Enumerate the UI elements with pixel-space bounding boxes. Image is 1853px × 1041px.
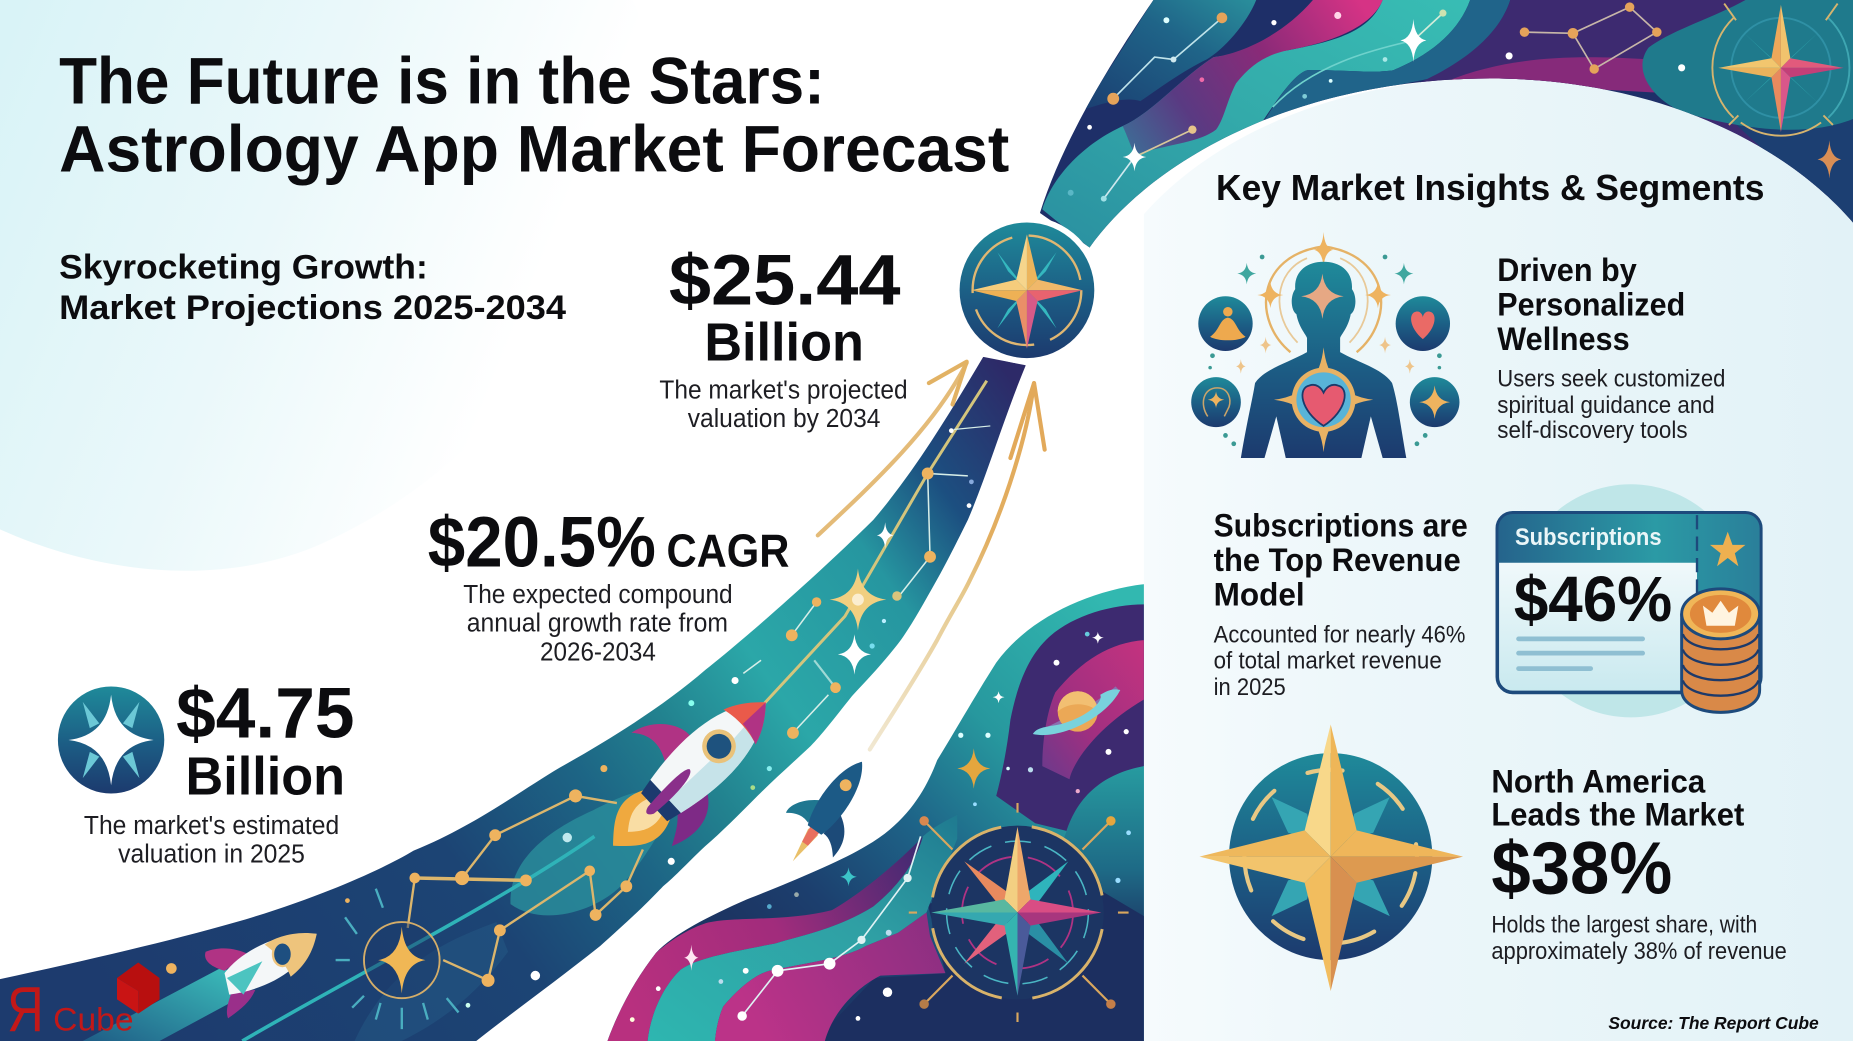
stat: 20.5 percent CAGR: 2026-2034	[540, 636, 656, 666]
stat: 25.44 billion	[659, 241, 908, 433]
insight: subscriptions: of total market revenue	[1214, 648, 1442, 675]
panel heading: Key Market Insights & Segments	[1216, 168, 1764, 208]
insight: north america: $38%	[1491, 826, 1672, 910]
insight: personalized wellness: Users seek customized	[1497, 366, 1725, 393]
stat: 4.75 billion: The market's estimated	[84, 810, 339, 840]
source note: Source: The Report Cube	[1608, 1013, 1819, 1033]
subtitle: Skyrocketing Growth:	[59, 248, 428, 286]
rocket: small navy	[765, 742, 888, 879]
compass emblem: central	[954, 217, 1100, 364]
stat: 25.44 billion: Billion	[704, 313, 864, 373]
coin stack	[1682, 589, 1760, 712]
rocket: large	[566, 651, 797, 879]
insight: subscriptions: in 2025	[1214, 674, 1286, 701]
insight: personalized wellness: Personalized	[1497, 286, 1685, 322]
rocket: lower left	[83, 933, 317, 1041]
title	[59, 44, 1009, 185]
insight: subscriptions	[1214, 507, 1468, 701]
icon: white star badge	[58, 686, 164, 794]
stat: 4.75 billion	[84, 674, 355, 869]
gold arrow: right	[870, 383, 1045, 750]
background: pale cyan blob top-left	[0, 0, 657, 571]
title: Astrology App Market Forecast	[59, 112, 1009, 185]
insight: north america	[1491, 763, 1787, 965]
insight: personalized wellness	[1497, 252, 1725, 444]
subtitle	[59, 248, 566, 327]
gold arrow: left	[818, 362, 967, 535]
stat: 25.44 billion: valuation by 2034	[688, 403, 880, 433]
sparkles: top galaxy	[1123, 19, 1841, 178]
lower right galaxy swoosh	[591, 577, 1146, 1041]
insight: north america: approximately 38% of revenue	[1491, 938, 1787, 965]
title: The Future is in the Stars:	[59, 44, 825, 118]
stat: 20.5 percent CAGR: CAGR	[667, 524, 789, 576]
panel: right insights background	[1144, 79, 1853, 1041]
insight: personalized wellness: Wellness	[1497, 321, 1630, 357]
constellation: lower right dots	[630, 632, 1131, 1022]
stat: 4.75 billion: valuation in 2025	[118, 838, 305, 869]
icon: big compass star	[1199, 725, 1463, 991]
stat: 20.5 percent CAGR: The expected compound	[463, 579, 733, 609]
insight: subscriptions: Model	[1214, 576, 1305, 613]
planet with ring	[1033, 688, 1120, 735]
stat: 20.5 percent CAGR: annual growth rate from	[467, 608, 728, 638]
stat: 4.75 billion: $4.75	[176, 674, 355, 754]
stat: 20.5 percent CAGR: $20.5%	[428, 503, 656, 582]
subtitle: Market Projections 2025-2034	[59, 289, 566, 327]
top right galaxy swoosh	[1028, 0, 1853, 256]
icon: person with heart and orbiting badges	[1191, 232, 1459, 458]
subscription card with coins: Subscriptions	[1515, 525, 1662, 551]
insight: subscriptions: the Top Revenue	[1214, 542, 1461, 578]
logo: RCube watermark: Cube	[53, 1001, 134, 1037]
stat: 25.44 billion: $25.44	[669, 241, 901, 321]
insight: personalized wellness: self-discovery tools	[1497, 417, 1688, 444]
stat: 4.75 billion: Billion	[186, 748, 345, 807]
logo: RCube watermark	[7, 962, 160, 1041]
stat: 20.5 percent CAGR	[428, 503, 789, 666]
stat: 25.44 billion: The market's projected	[659, 374, 908, 405]
constellation: lower main	[166, 700, 772, 1008]
constellation: top lines	[1068, 2, 1685, 202]
insight: north america: North America	[1491, 763, 1705, 799]
insight: personalized wellness: spiritual guidance and	[1497, 392, 1715, 419]
compass emblem: lower right	[909, 803, 1129, 1022]
main rocket trail swoosh	[0, 345, 1040, 1041]
compass emblem: top right corner	[1712, 4, 1849, 136]
constellation: upper main	[732, 381, 990, 739]
subscription card with coins	[1497, 484, 1761, 717]
compass ring: lower main	[336, 889, 459, 1029]
insight: personalized wellness: Driven by	[1497, 252, 1637, 288]
insight: subscriptions: Subscriptions are	[1214, 507, 1468, 544]
subscription card with coins: $46%	[1514, 563, 1672, 635]
insight: subscriptions: Accounted for nearly 46%	[1214, 621, 1465, 648]
insight: north america: Holds the largest share, with	[1491, 912, 1757, 939]
insight: north america: Leads the Market	[1491, 797, 1745, 833]
